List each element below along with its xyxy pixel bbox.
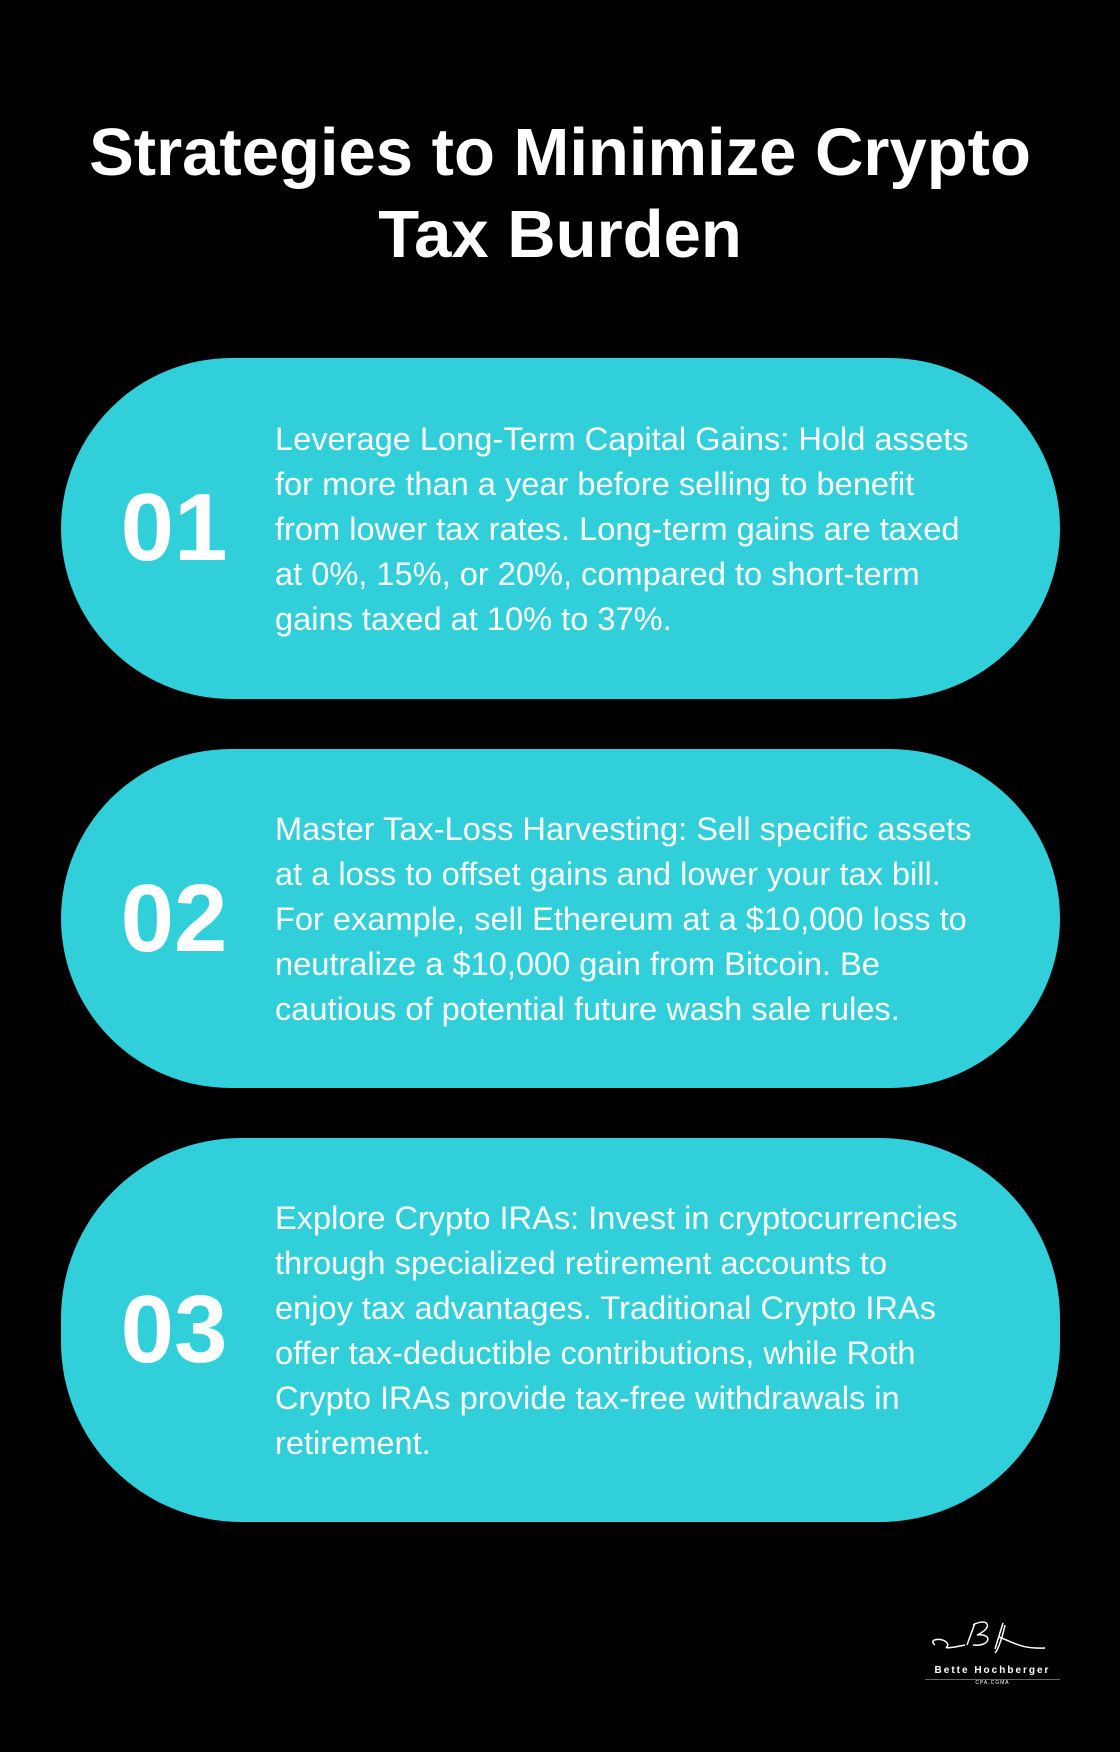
text block 03: Explore Crypto IRAs: Invest in cryptocurrencies <box>275 1199 958 1236</box>
text block 02: cautious of potential future wash sale rules. <box>275 990 900 1027</box>
logo: CPA,CGMA <box>975 1680 1010 1686</box>
text block 02: Master Tax-Loss Harvesting: Sell specific assets <box>275 810 971 847</box>
title: Tax Burden <box>378 197 742 272</box>
number 02: 02 <box>121 865 227 972</box>
panel: strategy 01 <box>61 358 1060 699</box>
text block 03: offer tax-deductible contributions, while Roth <box>275 1334 915 1371</box>
text block 01: Leverage Long-Term Capital Gains: Hold assets <box>275 420 969 457</box>
text block 01: from lower tax rates. Long-term gains are taxed <box>275 510 959 547</box>
text block 03: retirement. <box>275 1424 431 1461</box>
text block 03: through specialized retirement accounts to <box>275 1244 887 1281</box>
text block 01: for more than a year before selling to benefit <box>275 465 914 502</box>
text block 03: enjoy tax advantages. Traditional Crypto IRAs <box>275 1289 936 1326</box>
icon: signature <box>932 1621 1045 1654</box>
text block 02 <box>275 810 971 1027</box>
text block 02: at a loss to offset gains and lower your tax bill. <box>275 855 941 892</box>
text block 02: For example, sell Ethereum at a $10,000 loss to <box>275 900 967 937</box>
text block 01: at 0%, 15%, or 20%, compared to short-term <box>275 555 920 592</box>
logo text: Bette Hochberger <box>935 1665 1050 1676</box>
panel: strategy 03 <box>61 1138 1060 1522</box>
text block 01 <box>275 420 969 637</box>
text block 01: gains taxed at 10% to 37%. <box>275 600 672 637</box>
logo <box>925 1621 1060 1686</box>
text block 02: neutralize a $10,000 gain from Bitcoin. Be <box>275 945 880 982</box>
title <box>89 115 1031 272</box>
text block 03: Crypto IRAs provide tax-free withdrawals in <box>275 1379 900 1416</box>
number 01: 01 <box>121 474 227 581</box>
number 03: 03 <box>121 1276 227 1383</box>
panel: strategy 02 <box>61 749 1060 1088</box>
text block 03 <box>275 1199 958 1461</box>
title: Strategies to Minimize Crypto <box>89 115 1031 190</box>
